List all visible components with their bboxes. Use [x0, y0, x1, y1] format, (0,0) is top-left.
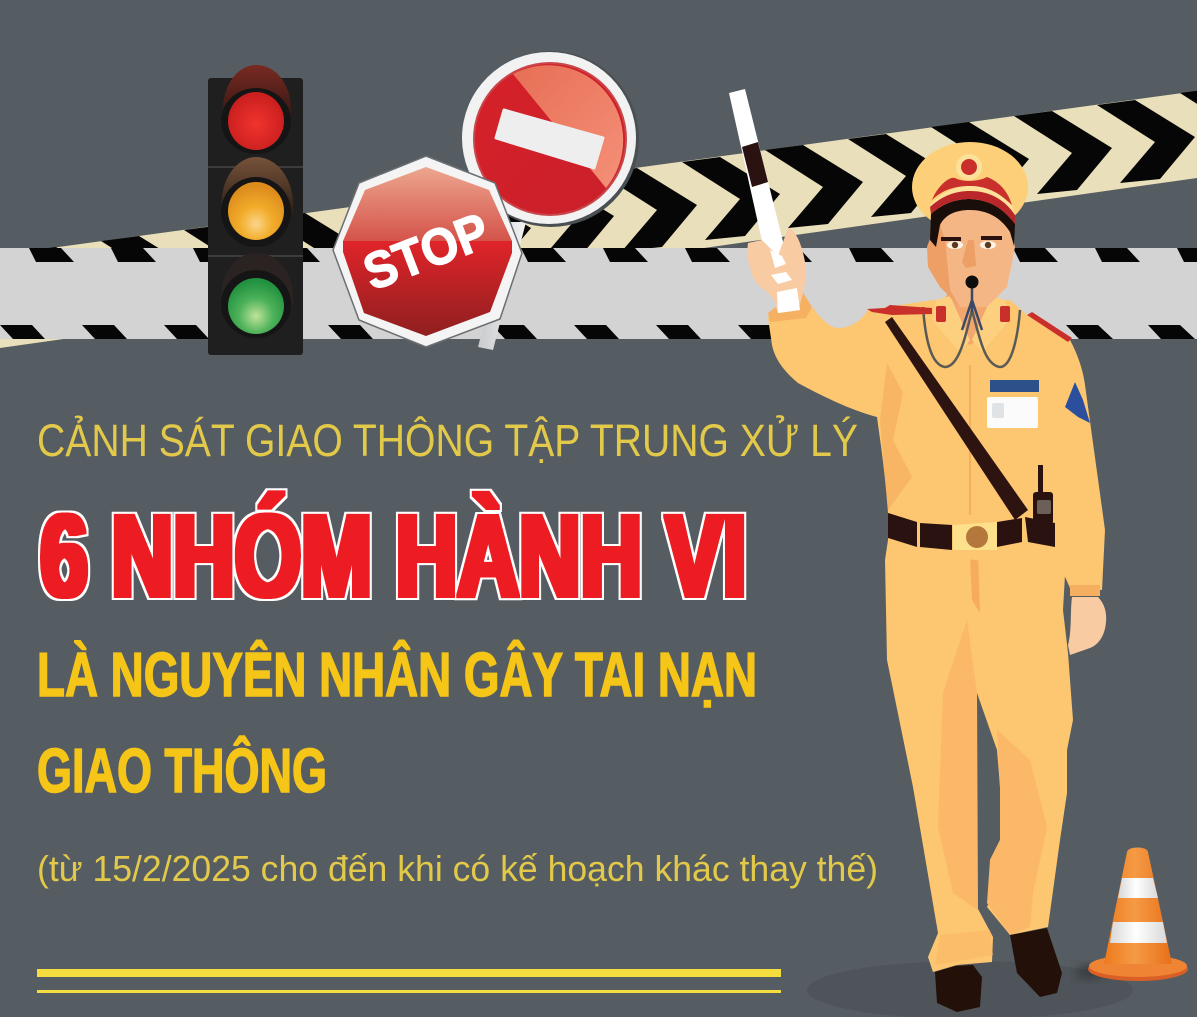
officer epaulets and collar tabs [867, 305, 1072, 342]
title line 4: GIAO THÔNG [37, 737, 327, 806]
officer radio [1025, 465, 1055, 547]
date note: (từ 15/2/2025 cho đến khi có kế hoạch khác thay thế) [37, 848, 878, 889]
icon: stop sign [333, 156, 522, 347]
chevron barrier tape [0, 88, 1197, 348]
title line 3: LÀ NGUYÊN NHÂN GÂY TAI NẠN [37, 641, 757, 710]
officer whistle and cord [923, 276, 1020, 367]
officer baton [729, 89, 800, 313]
officer right hand [1068, 597, 1106, 655]
officer jacket [768, 288, 1105, 596]
icon: no entry sign [462, 51, 639, 350]
officer belt [888, 513, 1022, 550]
footer double rule [37, 969, 781, 993]
officer shoes [935, 928, 1062, 1012]
officer face [927, 205, 1015, 307]
officer name tag [987, 380, 1039, 428]
officer shoulder strap [885, 317, 1028, 520]
icon: traffic light [208, 65, 303, 355]
grey barrier tape [0, 248, 1197, 339]
icon: stop sign: STOP [356, 202, 497, 301]
officer raised hand [747, 228, 806, 313]
officer cap [912, 142, 1028, 232]
officer arm patch [1065, 382, 1090, 423]
officer neck and collar [932, 290, 1010, 352]
police officer [729, 89, 1106, 1012]
ground shadow [807, 961, 1133, 1017]
officer hair [930, 199, 1015, 247]
officer legs [885, 540, 1073, 972]
title: 6 nhóm hành vi: 6 NHÓM HÀNH VI [40, 491, 746, 623]
officer cap band and emblem [930, 154, 1015, 224]
title line 1: CẢNH SÁT GIAO THÔNG TẬP TRUNG XỬ LÝ [37, 415, 858, 466]
icon: traffic cone [1076, 848, 1188, 981]
